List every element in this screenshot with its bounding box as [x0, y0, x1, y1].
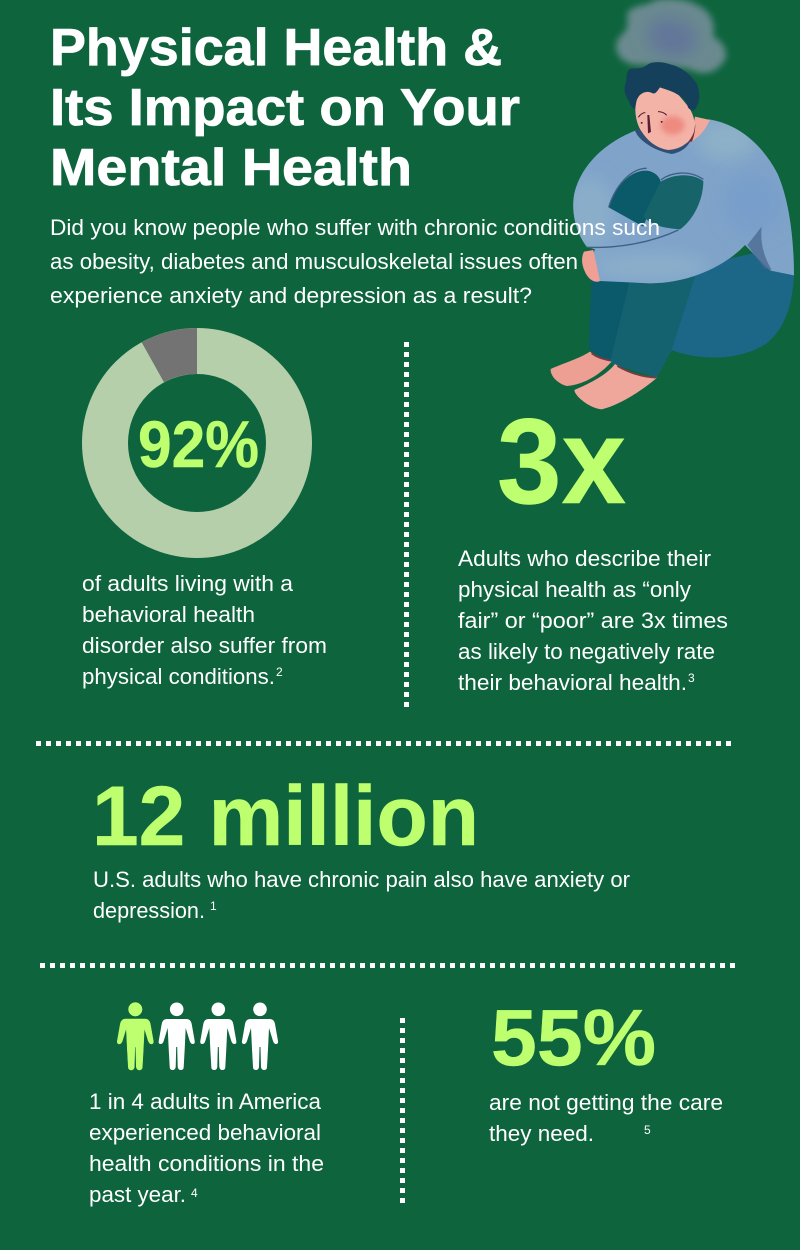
text: 92% description: of adults living with a	[82, 571, 294, 596]
text: 92% description	[82, 571, 327, 689]
title: Its Impact on Your	[50, 79, 520, 137]
icon: four people, one highlighted	[117, 1002, 278, 1070]
facial features	[638, 112, 667, 133]
intro text	[50, 215, 660, 308]
hand	[582, 250, 600, 282]
text: 3x description: their behavioral health.	[458, 670, 687, 695]
text: 3x description: as likely to negatively rate	[458, 639, 715, 664]
text: 92% description: 2	[276, 665, 283, 679]
text: 55% description: they need.	[489, 1121, 594, 1146]
text: 92% description: physical conditions.	[82, 664, 275, 689]
text: 55% description	[489, 1090, 723, 1146]
text: 55% description: 5	[644, 1123, 651, 1137]
text: 3x description: 3	[688, 671, 695, 685]
title: Physical Health &	[50, 19, 502, 77]
intro text: as obesity, diabetes and musculoskeletal issues often	[50, 249, 578, 274]
text: 12 million description: 1	[210, 899, 217, 913]
text: 3x description	[458, 546, 728, 695]
stat: 92%: 92%	[138, 407, 259, 481]
text: 92% description: disorder also suffer from	[82, 633, 327, 658]
text: 3x description: Adults who describe their	[458, 546, 711, 571]
text: 92% description: behavioral health	[82, 602, 255, 627]
text: 3x description: physical health as “only	[458, 577, 691, 602]
text: 12 million description: depression.	[93, 898, 205, 923]
text: 1 in 4 description: experienced behavioral	[89, 1120, 321, 1145]
stat: 12 million: 12 million	[92, 769, 479, 863]
cheek	[661, 116, 685, 135]
illustration: sad person with cloud	[551, 0, 794, 409]
stat: 55%: 55%	[491, 993, 656, 1082]
person 3	[200, 1002, 236, 1070]
person highlighted	[117, 1002, 153, 1070]
text: 1 in 4 description: past year.	[89, 1182, 186, 1207]
neck	[690, 117, 710, 142]
text: 12 million description: U.S. adults who have chronic pain also have anxiety or	[93, 867, 630, 892]
text: 1 in 4 description: 1 in 4 adults in America	[89, 1089, 322, 1114]
legs	[589, 253, 794, 378]
text: 1 in 4 description: health conditions in the	[89, 1151, 324, 1176]
cloud	[616, 0, 726, 73]
intro text: experience anxiety and depression as a result?	[50, 283, 532, 308]
title: Mental Health	[50, 139, 412, 197]
face	[635, 87, 695, 150]
hair	[625, 62, 699, 111]
text: 55% description: are not getting the care	[489, 1090, 723, 1115]
donut chart: 92%	[105, 328, 289, 535]
text: 1 in 4 description: 4	[191, 1186, 198, 1200]
sweater	[567, 119, 794, 283]
title	[50, 19, 520, 197]
text: 3x description: fair” or “poor” are 3x times	[458, 608, 728, 633]
neck shadow	[688, 124, 695, 143]
person 4	[242, 1002, 278, 1070]
text: 1 in 4 description	[89, 1089, 324, 1207]
intro text: Did you know people who suffer with chronic conditions such	[50, 215, 660, 240]
stat: 3x: 3x	[497, 393, 626, 529]
person 2	[159, 1002, 195, 1070]
collar shadow	[635, 128, 690, 154]
feet	[551, 352, 657, 409]
dotted dividers	[36, 342, 736, 1204]
text: 12 million description	[93, 867, 630, 923]
